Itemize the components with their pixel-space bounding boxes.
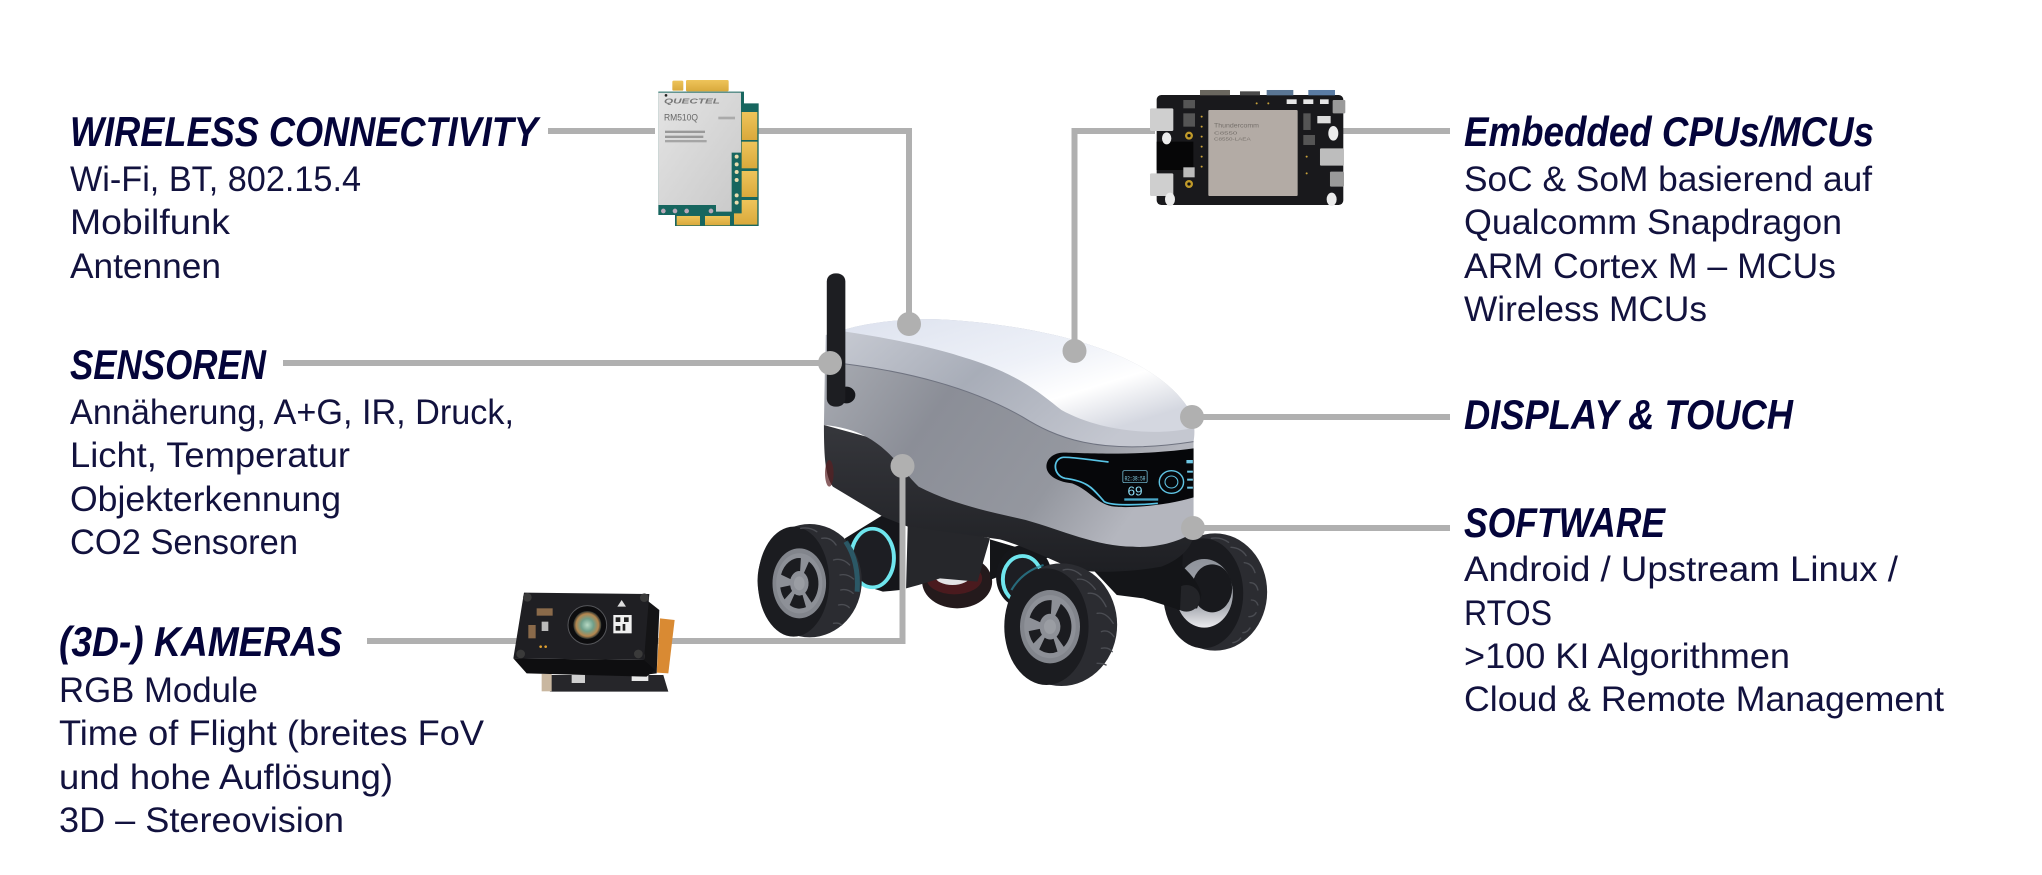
text block: 3D cameras: RGB Module [59, 671, 258, 710]
text block: 3D cameras [59, 618, 485, 840]
text block: embedded CPUs: Embedded CPUs/MCUs [1464, 108, 1874, 155]
undercarriage [906, 520, 1183, 610]
module: Embedded CPU board: Thundercomm [1214, 122, 1259, 129]
module: Embedded CPU board [1150, 90, 1345, 206]
icon: lid [825, 319, 1194, 447]
module: Embedded CPU board: C8550 [1214, 131, 1238, 137]
display panel: 69 [1127, 484, 1143, 498]
anchor dots [818, 312, 1205, 540]
display panel: 02:38:50 [1125, 476, 1145, 483]
text block: embedded CPUs: ARM Cortex M – MCUs [1464, 247, 1836, 286]
text block: sensoren [70, 341, 514, 562]
text block: embedded CPUs: Qualcomm Snapdragon [1464, 203, 1842, 242]
text block: sensoren: Licht, Temperatur [70, 436, 350, 475]
text block: embedded CPUs [1464, 108, 1874, 329]
text block: 3D cameras: und hohe Auflösung) [59, 758, 393, 797]
icon: front left wheel [757, 524, 862, 637]
robot illustration [757, 273, 1267, 686]
icon: front center wheel [1004, 563, 1117, 686]
text block: 3D cameras: Time of Flight (breites FoV [59, 714, 485, 753]
text block: sensoren: SENSOREN [70, 341, 267, 388]
text block: software [1464, 499, 1944, 719]
module: Quectel wireless card: RM510Q [664, 113, 698, 123]
icon: center hub with cyan ring [996, 545, 1052, 608]
icon: rear center wheel, red glow [922, 555, 992, 608]
module: 3D camera [513, 593, 675, 692]
display panel [1046, 448, 1194, 507]
icon: right rear wheel [1163, 533, 1267, 651]
text block: sensoren: CO2 Sensoren [70, 523, 298, 562]
text block: software: RTOS [1464, 594, 1552, 633]
icon: antenna [827, 273, 855, 407]
text block: wireless connectivity: WIRELESS CONNECTIVITY [70, 108, 541, 155]
text block: wireless connectivity [70, 108, 541, 286]
text block: wireless connectivity: Wi-Fi, BT, 802.15.4 [70, 160, 361, 199]
text block: sensoren: Objekterkennung [70, 480, 341, 519]
text block: 3D cameras: 3D – Stereovision [59, 801, 344, 840]
text block: wireless connectivity: Mobilfunk [70, 203, 231, 242]
text block: sensoren: Annäherung, A+G, IR, Druck, [70, 393, 514, 432]
text block: embedded CPUs: Wireless MCUs [1464, 290, 1707, 329]
text block: display and touch: DISPLAY & TOUCH [1464, 391, 1794, 438]
text block: software: >100 KI Algorithmen [1464, 637, 1790, 676]
module: Embedded CPU board: C8550-LAEA [1214, 136, 1252, 142]
module: Quectel wireless card [658, 80, 759, 226]
text block: wireless connectivity: Antennen [70, 247, 221, 286]
text block: software: Cloud & Remote Management [1464, 680, 1944, 719]
icon: dark base of robot [824, 425, 1194, 572]
text block: software: SOFTWARE [1464, 499, 1667, 546]
text block: embedded CPUs: SoC & SoM basierend auf [1464, 160, 1872, 199]
connector lines [283, 131, 1450, 641]
icon: left hub with cyan ring [845, 513, 900, 592]
icon: body side panel [824, 362, 1194, 547]
text block: software: Android / Upstream Linux / [1464, 550, 1898, 589]
module: Quectel wireless card: QUECTEL [664, 96, 721, 105]
text block: 3D cameras: (3D-) KAMERAS [59, 618, 342, 665]
